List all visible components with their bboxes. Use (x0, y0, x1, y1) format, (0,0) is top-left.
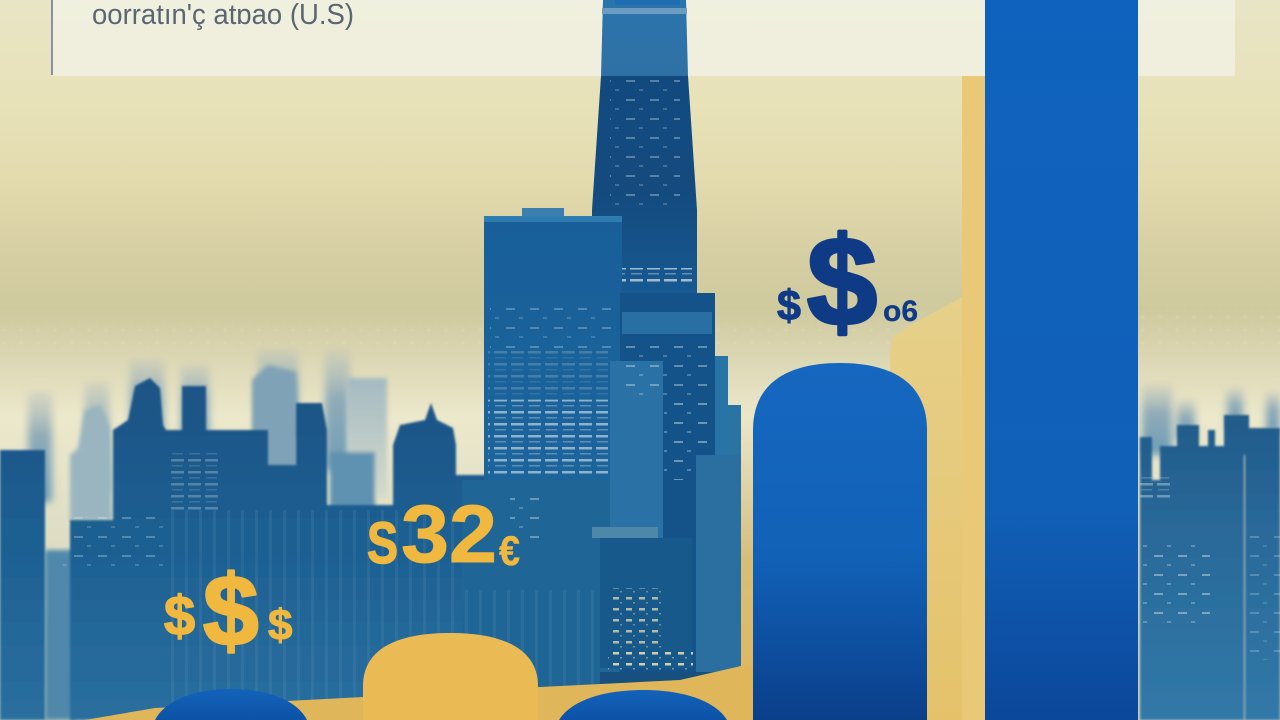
bar 4: large blue (753, 363, 927, 720)
label: dollar signs over bar 1: $ (203, 555, 259, 667)
yellow building behind tall bar (890, 76, 985, 720)
yellow ground strip (85, 666, 755, 720)
label: $32 over bar 2: € (499, 527, 520, 574)
side yellow strip left of large bar (741, 400, 755, 720)
label: dollar sign over bar 4: $ (807, 211, 877, 352)
label: dollar sign over bar 4: o6 (883, 295, 918, 328)
bar 3: short blue (559, 690, 727, 720)
label: $32 over bar 2: S (367, 511, 398, 576)
label: dollar signs over bar 1 (164, 555, 292, 667)
city lights haze band (0, 308, 1280, 352)
central skyscraper: base buildings (462, 480, 740, 720)
skyline: pale far towers (28, 350, 1280, 502)
bar 1: short blue (155, 689, 307, 720)
label: dollar signs over bar 1: $ (164, 584, 195, 647)
label: $32 over bar 2 (367, 489, 520, 580)
skyline: dark buildings right (1140, 415, 1280, 720)
bar 5: tall blue (985, 0, 1138, 720)
central skyscraper: lower right setbacks (610, 293, 741, 720)
header panel (51, 0, 1235, 76)
skyline: dark buildings left (0, 378, 496, 720)
central skyscraper: main block (484, 208, 622, 720)
label: $32 over bar 2: 32 (401, 489, 497, 580)
label: dollar sign over bar 4 (777, 211, 918, 352)
skyline: mid grey-blue towers (45, 365, 387, 720)
bar 2: yellow (363, 633, 538, 720)
skyline: window lights (60, 450, 1280, 720)
label: dollar sign over bar 4: $ (777, 282, 801, 330)
central skyscraper: tall tower (592, 0, 697, 310)
label: dollar signs over bar 1: $ (268, 601, 292, 650)
